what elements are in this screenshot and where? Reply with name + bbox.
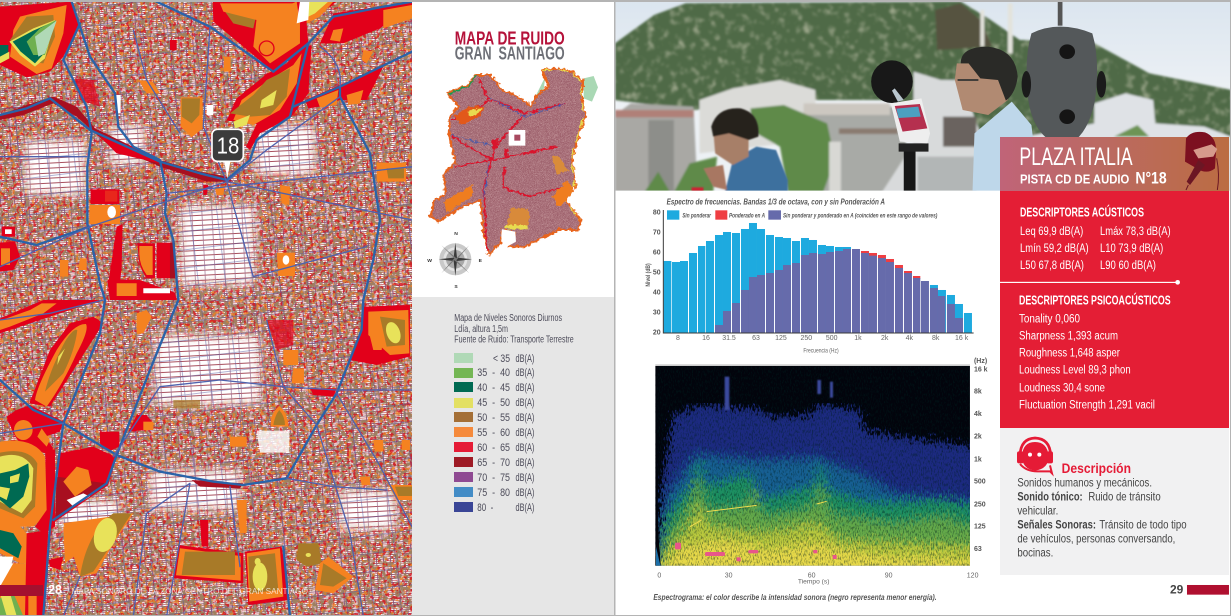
locator square <box>509 130 525 146</box>
psychoacoustic descriptors: Sharpness 1,393 acum <box>1019 329 1118 343</box>
chart: spectrogram <box>653 358 988 602</box>
chart legend <box>667 210 938 220</box>
legend labels: dB(A) <box>516 412 534 424</box>
x axis labels <box>676 335 969 355</box>
chart axes <box>663 210 974 333</box>
icon: microphone head <box>1185 132 1219 190</box>
chart legend: Sin ponderar y ponderado en A (coinciden en este rango de valores) <box>783 212 938 219</box>
title: Mapa de ruido: MAPA DE RUIDO <box>455 28 565 48</box>
spectrogram caption: Espectrograma: el color describe la intensidad sonora (negro representa menor energía). <box>653 592 937 602</box>
spectrogram time axis: 0 <box>657 572 661 579</box>
spectrogram frequency axis: 250 <box>974 501 986 508</box>
panel: noise map of central Santiago <box>0 0 412 616</box>
x axis labels: 250 <box>800 335 812 342</box>
acoustic descriptors: Leq 69,9 dB(A) <box>1020 224 1083 238</box>
overview map of Gran Santiago <box>427 68 598 290</box>
legend labels: dB(A) <box>516 382 534 394</box>
psychoacoustic descriptors: DESCRIPTORES PSICOACÚSTICOS <box>1019 292 1171 307</box>
icon: compass rose: N <box>454 231 458 237</box>
legend caption: Fuente de Ruido: Transporte Terrestre <box>454 334 574 346</box>
map shapes: south half <box>0 300 412 616</box>
legend labels: 35 - 40 <box>477 367 510 379</box>
spectrogram frequency axis: 63 <box>974 546 982 553</box>
map pin: site 18 <box>212 129 243 178</box>
sound level meter on tripod <box>871 60 930 192</box>
description body text: Tránsito de todo tipo <box>1099 519 1187 532</box>
psychoacoustic descriptors: Fluctuation Strength 1,291 vacil <box>1019 398 1155 412</box>
description body text <box>1017 476 1187 560</box>
spectrogram frequency axis: 500 <box>974 478 986 485</box>
x axis labels: 16 k <box>955 335 969 342</box>
legend caption <box>454 313 574 346</box>
legend labels: dB(A) <box>516 457 534 469</box>
map pin: site 18: 18 <box>217 132 239 158</box>
legend swatches <box>454 353 473 512</box>
y axis labels: 50 <box>653 269 661 276</box>
panel: descriptors <box>1000 191 1229 428</box>
map roads: blue traffic corridors <box>0 2 412 616</box>
acoustic descriptors: L90 60 dB(A) <box>1100 258 1156 272</box>
description body text: Señales Sonoras: <box>1017 519 1096 532</box>
description body text: vehicular. <box>1017 505 1058 518</box>
spectrogram time axis: 30 <box>725 572 733 579</box>
footer: page 28 <box>0 585 308 596</box>
chart legend: Sin ponderar <box>682 212 711 219</box>
spectrogram time axis: 90 <box>885 572 893 579</box>
title band: Plaza Italia: PLAZA ITALIA <box>1019 143 1133 171</box>
x axis labels: 8 <box>676 335 680 342</box>
x axis labels: 16 <box>702 335 710 342</box>
page number 29 <box>1170 583 1229 597</box>
spectrogram frequency axis: 2k <box>974 433 982 440</box>
spectrogram frequency axis: 4k <box>974 411 982 418</box>
y axis labels: 40 <box>653 289 661 296</box>
legend labels: 75 - 80 <box>477 487 510 499</box>
x axis labels: 4k <box>906 335 913 342</box>
panel: map heading and overview <box>412 2 614 297</box>
spectrogram frequency axis: 8k <box>974 388 982 395</box>
legend labels: 80 - <box>477 502 494 514</box>
chart title: Espectro de frecuencias. Bandas 1/3 de octava, con y sin Ponderación A <box>667 196 885 206</box>
legend caption: Mapa de Niveles Sonoros Diurnos <box>454 313 562 324</box>
legend labels: dB(A) <box>516 427 534 439</box>
legend labels: 65 - 70 <box>477 457 510 469</box>
panel: description <box>1000 428 1229 597</box>
title band: Plaza Italia <box>1000 132 1229 191</box>
map shapes: north half <box>0 2 412 300</box>
spectrogram time axis: Tiempo (s) <box>798 579 829 586</box>
acoustic descriptors: Lmáx 78,3 dB(A) <box>1100 224 1171 238</box>
spectrogram frequency axis: (Hz) <box>974 358 987 365</box>
spectrogram time axis: 120 <box>967 572 979 579</box>
legend labels: 55 - 60 <box>477 427 510 439</box>
chart legend: Ponderado en A <box>729 212 765 219</box>
y axis labels <box>646 209 661 336</box>
legend labels: dB(A) <box>516 472 534 484</box>
icon: face with headphones <box>1017 438 1053 473</box>
binaural dummy head <box>1022 2 1106 143</box>
x axis labels: 2k <box>881 335 889 342</box>
chart: frequency spectrum <box>646 196 974 355</box>
x axis labels: Frecuencia (Hz) <box>803 348 839 355</box>
legend labels: 45 - 50 <box>477 397 510 409</box>
legend labels: dB(A) <box>516 353 534 365</box>
description body text: Ruido de tránsito <box>1088 491 1161 504</box>
x axis labels: 125 <box>775 335 787 342</box>
x axis labels: 1k <box>854 335 862 342</box>
left man <box>692 108 788 192</box>
footer: page 28: / MAPA SONORO DE LA ZONA CENTRO DEL GRAN SANTIAGO <box>67 586 308 596</box>
psychoacoustic descriptors <box>1019 292 1171 412</box>
acoustic descriptors: L10 73,9 dB(A) <box>1100 241 1163 255</box>
footer: page 28: 28 <box>48 582 62 597</box>
legend labels: 60 - 65 <box>477 442 510 454</box>
title band: Plaza Italia: N°18 <box>1135 168 1167 187</box>
spectrogram frequency axis <box>974 358 988 553</box>
description body text: Sonidos humanos y mecánicos. <box>1017 476 1152 489</box>
x axis labels: 500 <box>826 335 838 342</box>
legend labels: 50 - 55 <box>477 412 510 424</box>
x axis labels: 63 <box>752 335 760 342</box>
legend labels: dB(A) <box>516 397 534 409</box>
y axis labels: 30 <box>653 309 661 316</box>
y axis labels: 20 <box>653 329 661 336</box>
y axis labels: 80 <box>653 209 661 216</box>
acoustic descriptors <box>1020 205 1171 272</box>
icon: compass rose: S <box>454 284 458 290</box>
legend labels <box>477 353 534 514</box>
x axis labels: 31.5 <box>722 335 736 342</box>
page number 29: 29 <box>1170 583 1184 597</box>
y axis labels: 60 <box>653 249 661 256</box>
x axis labels: 8k <box>932 335 940 342</box>
panel: description: Descripción <box>1062 460 1131 476</box>
legend labels: 40 - 45 <box>477 382 510 394</box>
overlapping bars <box>715 249 963 333</box>
legend labels: dB(A) <box>516 487 534 499</box>
y axis labels: 70 <box>653 229 661 236</box>
spectrogram time axis: 60 <box>808 572 816 579</box>
right man <box>955 47 1039 192</box>
description body text: de vehículos, personas conversando, <box>1017 533 1175 546</box>
title: Mapa de ruido <box>455 28 565 64</box>
psychoacoustic descriptors: Loudness Level 89,3 phon <box>1019 363 1131 377</box>
legend labels: 70 - 75 <box>477 472 510 484</box>
y axis labels: Nivel (dB) <box>646 263 652 287</box>
acoustic descriptors: L50 67,8 dB(A) <box>1020 258 1084 272</box>
spectrogram frequency axis: 125 <box>974 523 986 530</box>
acoustic descriptors: Lmín 59,2 dB(A) <box>1020 241 1089 255</box>
icon: compass rose: W <box>427 258 432 264</box>
legend caption: Ldía, altura 1,5m <box>454 324 508 335</box>
icon: compass rose <box>427 231 483 290</box>
title: Mapa de ruido: GRAN SANTIAGO <box>455 44 565 64</box>
unweighted bars <box>664 223 972 333</box>
description body text: Sonido tónico: <box>1017 491 1083 504</box>
legend labels: dB(A) <box>516 502 534 514</box>
legend labels: < 35 <box>493 353 510 365</box>
A-weighted bars <box>861 251 920 279</box>
icon: compass rose: E <box>479 258 483 264</box>
legend labels: dB(A) <box>516 367 534 379</box>
legend labels: dB(A) <box>516 442 534 454</box>
acoustic descriptors: DESCRIPTORES ACÚSTICOS <box>1020 205 1144 220</box>
panel: photo of measurement at Plaza Italia <box>616 2 1230 191</box>
psychoacoustic descriptors: Tonality 0,060 <box>1019 312 1080 326</box>
psychoacoustic descriptors: Loudness 30,4 sone <box>1019 381 1105 395</box>
spectrogram time axis <box>657 572 979 586</box>
spectrogram frequency axis: 16 k <box>974 367 988 374</box>
title band: Plaza Italia: PISTA CD DE AUDIO <box>1020 172 1129 186</box>
spectrogram frequency axis: 1k <box>974 456 982 463</box>
psychoacoustic descriptors: Roughness 1,648 asper <box>1019 346 1120 360</box>
description body text: bocinas. <box>1017 547 1053 560</box>
panel: map legend <box>412 297 614 615</box>
